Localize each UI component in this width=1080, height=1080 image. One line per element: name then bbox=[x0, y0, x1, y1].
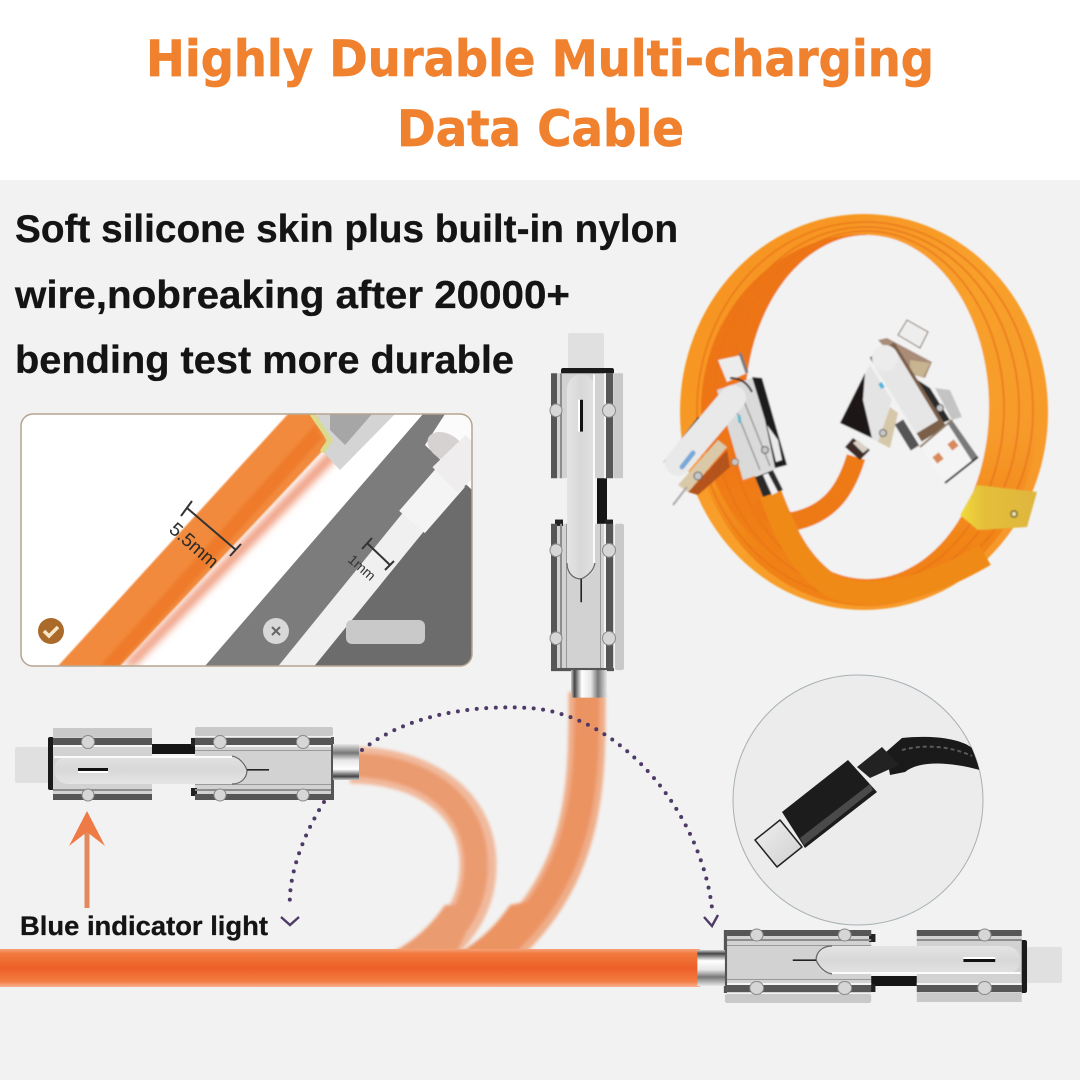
coil ring bbox=[680, 214, 1048, 610]
title: Data Cable bbox=[397, 100, 684, 158]
loop cable from left connector bbox=[350, 765, 478, 960]
5.5mm dimension bbox=[165, 501, 241, 573]
cable B curve bbox=[755, 457, 856, 522]
1mm dimension: 1mm bbox=[345, 551, 379, 584]
title: Highly Durable Multi-charging bbox=[146, 30, 934, 88]
vertical cable from top connector bbox=[460, 692, 587, 960]
description text bbox=[14, 208, 678, 382]
grey surface bbox=[205, 414, 472, 666]
connector: vertical bbox=[550, 333, 624, 698]
icon: cross bbox=[263, 618, 289, 644]
label: blue indicator light: Blue indicator light bbox=[20, 911, 268, 941]
5.5mm dimension: 5.5mm bbox=[165, 519, 222, 573]
connector A bbox=[663, 353, 787, 505]
horizontal orange cable bbox=[0, 949, 700, 987]
icon: check bbox=[38, 618, 64, 644]
description text: Soft silicone skin plus built-in nylon bbox=[15, 208, 678, 251]
white cable bbox=[285, 520, 415, 680]
orange cable bbox=[58, 414, 328, 666]
circle detail: black braided type-C cable bbox=[733, 675, 983, 925]
red glow bbox=[122, 448, 340, 666]
connector: left bbox=[15, 727, 359, 801]
braided silver bbox=[312, 414, 395, 470]
title bbox=[146, 30, 934, 158]
description text: bending test more durable bbox=[15, 339, 514, 382]
connector: right bbox=[697, 929, 1062, 1003]
chevrons bbox=[281, 915, 718, 926]
cable A curve bbox=[770, 493, 985, 593]
1mm dimension bbox=[345, 538, 394, 584]
coiled orange cable photo bbox=[663, 214, 1048, 610]
description text: wire,nobreaking after 20000+ bbox=[14, 274, 570, 317]
panel: cable thickness comparison bbox=[21, 414, 478, 680]
dotted motion arcs bbox=[290, 707, 712, 908]
clip: yellow strap bbox=[960, 485, 1037, 530]
blank label pill bbox=[346, 620, 425, 644]
connector B bbox=[840, 320, 978, 483]
arrow: blue indicator bbox=[69, 811, 105, 908]
yellow ring bbox=[312, 414, 330, 452]
